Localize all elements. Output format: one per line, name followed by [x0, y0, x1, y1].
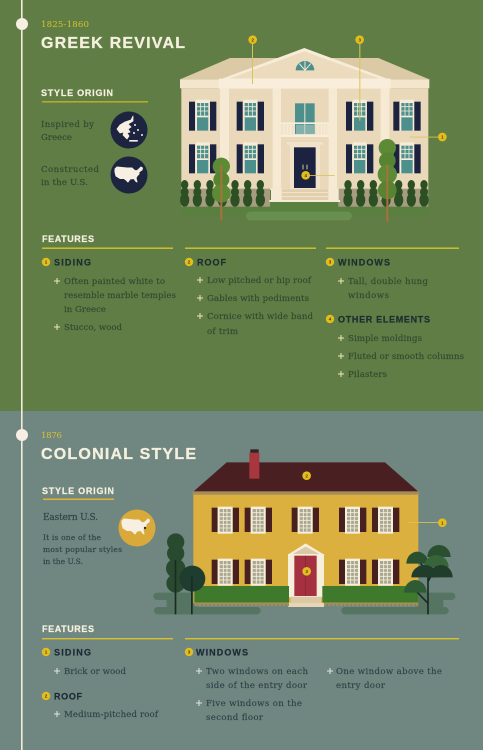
- column: roof: ROOF: [197, 258, 226, 268]
- panel: features, Colonial Style: [42, 624, 459, 723]
- column: roof: 2: [188, 260, 191, 265]
- title: Colonial Style: COLONIAL STYLE: [41, 446, 196, 463]
- fence: [194, 600, 418, 609]
- balcony door: [295, 103, 315, 134]
- marker 1: siding: [407, 518, 447, 527]
- column: windows and other elements: 3: [329, 260, 332, 265]
- lower windows: [189, 142, 421, 173]
- icon: map of Greece: [110, 112, 148, 148]
- column: windows: One window above the: [336, 667, 442, 677]
- column: siding: Often painted white to: [64, 277, 165, 287]
- marker 2: roof: [248, 35, 257, 84]
- walls: [181, 88, 428, 190]
- column: roof: of trim: [207, 327, 238, 337]
- date: 1876: 1876: [41, 431, 62, 441]
- column: roof: Low pitched or hip roof: [207, 276, 312, 286]
- entry door: [287, 543, 325, 597]
- marker 1: siding: 1: [441, 520, 444, 525]
- column: siding: resemble marble temples: [64, 291, 176, 301]
- column: windows: side of the entry door: [206, 681, 308, 691]
- panel: Colonial Style background: [0, 411, 483, 750]
- text: popularity note: It is one of the: [43, 533, 102, 542]
- marker 3: windows: [302, 567, 311, 576]
- text: constructed in the U.S.: in the U.S.: [41, 178, 88, 188]
- column: siding: Stucco, wood: [64, 323, 122, 333]
- heading: features: FEATURES: [42, 624, 94, 634]
- foundation: [181, 189, 428, 207]
- date: 1825-1860: 1825-1860: [41, 20, 89, 30]
- column: siding and roof: ROOF: [54, 692, 82, 702]
- column: siding and roof: 1: [45, 650, 48, 655]
- shrubs, left: [180, 180, 265, 207]
- entry door: [287, 142, 323, 189]
- column: windows and other elements: Tall, double hung: [348, 277, 428, 287]
- shrubs, right: [343, 180, 429, 207]
- column: siding and roof: SIDING: [54, 648, 91, 658]
- panel: style origin, Colonial Style: [42, 486, 156, 566]
- text: inspired by Greece: [41, 120, 94, 143]
- column: roof: Gables with pediments: [207, 294, 309, 304]
- walls: [193, 493, 418, 603]
- column: siding: 1: [45, 260, 48, 265]
- upper windows: [189, 100, 421, 131]
- panel: features, Greek Revival: [42, 234, 464, 380]
- topiary tree, left: [212, 158, 231, 220]
- text: constructed in the U.S.: [41, 165, 99, 188]
- columns: [220, 88, 389, 202]
- column: siding: in Greece: [64, 305, 106, 315]
- icon: map of the U.S.: [110, 156, 148, 194]
- column: siding and roof: Medium-pitched roof: [64, 710, 159, 720]
- column: siding: SIDING: [54, 258, 91, 268]
- marker 4: other elements: [301, 171, 335, 180]
- column: windows: entry door: [336, 681, 386, 691]
- column: siding and roof: 2: [45, 694, 48, 699]
- upper windows: [212, 507, 399, 534]
- chimney: [249, 449, 259, 479]
- text: constructed in the U.S.: Constructed: [41, 165, 99, 175]
- lower windows: [212, 559, 399, 586]
- balcony: [281, 122, 334, 137]
- ground shapes: [153, 593, 455, 614]
- roof: [193, 462, 418, 492]
- column: windows and other elements: [326, 258, 464, 380]
- column: windows: second floor: [206, 713, 264, 723]
- hedges: [194, 586, 418, 603]
- tree, right: [404, 545, 453, 614]
- column: siding and roof: Brick or wood: [64, 667, 126, 677]
- title: Greek Revival: GREEK REVIVAL: [41, 35, 185, 52]
- text: inspired by Greece: Inspired by: [41, 120, 94, 130]
- heading: style origin: STYLE ORIGIN: [41, 88, 113, 98]
- illustration: Colonial house: [153, 449, 455, 614]
- column: windows and other elements: windows: [348, 291, 389, 301]
- marker 4: other elements: 4: [304, 173, 307, 178]
- column: windows: Two windows on each: [206, 667, 308, 677]
- front steps: [288, 597, 324, 607]
- fanlight window: [296, 61, 314, 70]
- column: windows and other elements: Simple moldings: [348, 334, 422, 344]
- marker 3: windows: 3: [358, 37, 361, 42]
- cornice: [180, 79, 429, 88]
- chimney front: [249, 462, 259, 479]
- marker 1: siding: 1: [441, 135, 444, 140]
- topiary tree, right: [378, 139, 397, 222]
- heading: style origin: STYLE ORIGIN: [42, 486, 114, 496]
- text: popularity note: most popular styles: [43, 545, 122, 554]
- marker 3: windows: [355, 35, 364, 121]
- column: roof: [185, 258, 313, 337]
- column: siding and roof: [42, 648, 159, 720]
- column: windows: WINDOWS: [196, 648, 248, 658]
- column: windows and other elements: OTHER ELEMENTS: [338, 314, 430, 324]
- marker 2: roof: 2: [305, 473, 308, 478]
- text: popularity note: [43, 533, 122, 566]
- column: windows: [185, 648, 442, 723]
- column: windows and other elements: Fluted or smooth columns: [348, 352, 464, 362]
- column: windows: 3: [188, 650, 191, 655]
- column: siding: [42, 258, 176, 333]
- hip roof: [180, 58, 429, 79]
- trees, left: [166, 533, 205, 614]
- text: inspired by Greece: Greece: [41, 133, 72, 143]
- marker 2: roof: 2: [251, 37, 254, 42]
- column: windows and other elements: Pilasters: [348, 370, 387, 380]
- timeline: [16, 0, 28, 750]
- front steps: [269, 189, 340, 202]
- column: windows: Five windows on the: [206, 699, 302, 709]
- marker 3: windows: 3: [305, 569, 308, 574]
- text: popularity note: in the U.S.: [43, 557, 83, 566]
- panel: Greek Revival background: [0, 0, 483, 411]
- column: windows and other elements: 4: [329, 317, 332, 322]
- text: Eastern U.S.: Eastern U.S.: [43, 513, 98, 523]
- column: windows and other elements: WINDOWS: [338, 258, 390, 268]
- cornice: [193, 491, 419, 495]
- icon: map of the eastern U.S.: [118, 510, 156, 546]
- panel: style origin, Greek Revival: [41, 88, 148, 194]
- heading: features: FEATURES: [42, 234, 94, 244]
- column: roof: Cornice with wide band: [207, 312, 313, 322]
- marker 1: siding: [410, 133, 447, 141]
- lawn: [181, 202, 428, 220]
- pediment: [219, 48, 391, 89]
- marker 2: roof: [302, 471, 311, 480]
- illustration: Greek Revival house: [180, 35, 447, 222]
